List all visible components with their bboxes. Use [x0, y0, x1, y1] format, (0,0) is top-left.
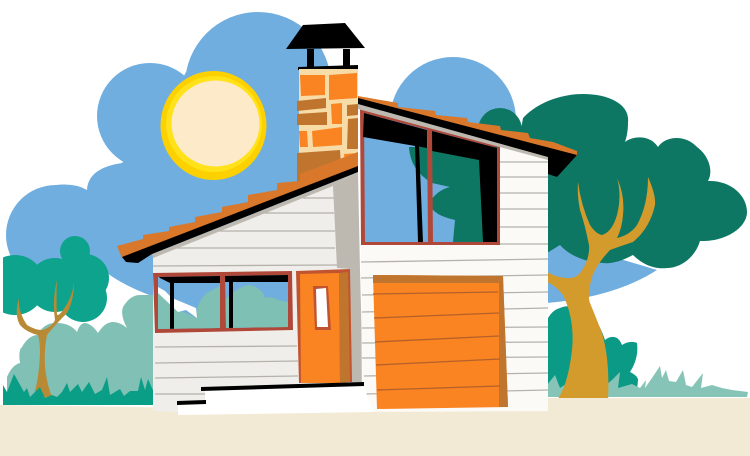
chimney body — [299, 69, 358, 180]
garage door lines — [373, 292, 500, 390]
right roof — [358, 96, 577, 177]
orange stones — [299, 73, 358, 163]
right roof grey trim — [358, 104, 548, 160]
right roof fascia — [358, 98, 577, 177]
right tree trunk — [547, 177, 655, 402]
left roof grey trim — [152, 172, 358, 258]
right house wall — [360, 104, 548, 412]
window post — [415, 145, 423, 242]
left roof tiles — [117, 152, 358, 258]
left bush — [7, 295, 155, 400]
chimney cap — [286, 23, 365, 70]
left pane — [158, 276, 220, 329]
garage door — [373, 275, 508, 409]
left house wall — [153, 172, 363, 412]
right bush — [547, 306, 638, 395]
siding lines — [361, 162, 548, 394]
left tree trunk — [17, 280, 74, 398]
siding lines — [153, 198, 337, 394]
tree seen through window — [409, 147, 497, 242]
front door — [296, 269, 352, 383]
front steps — [177, 382, 373, 415]
sky clouds — [6, 12, 657, 320]
chimney — [286, 23, 365, 185]
left tree crown — [0, 236, 109, 322]
door window — [313, 286, 331, 330]
right tree crown — [478, 94, 747, 268]
window black shade — [363, 113, 427, 148]
grey side wall — [333, 172, 363, 384]
lower window — [153, 271, 293, 333]
right grass — [547, 366, 748, 397]
upper window — [360, 107, 500, 245]
left roof fascia — [122, 166, 358, 263]
right roof tiles — [358, 96, 577, 156]
brown stones — [297, 98, 358, 185]
ground — [0, 398, 750, 456]
left roof — [117, 152, 358, 263]
sun — [160, 71, 266, 180]
window mullion — [427, 128, 433, 243]
right pane — [224, 274, 290, 330]
left grass — [3, 374, 155, 405]
